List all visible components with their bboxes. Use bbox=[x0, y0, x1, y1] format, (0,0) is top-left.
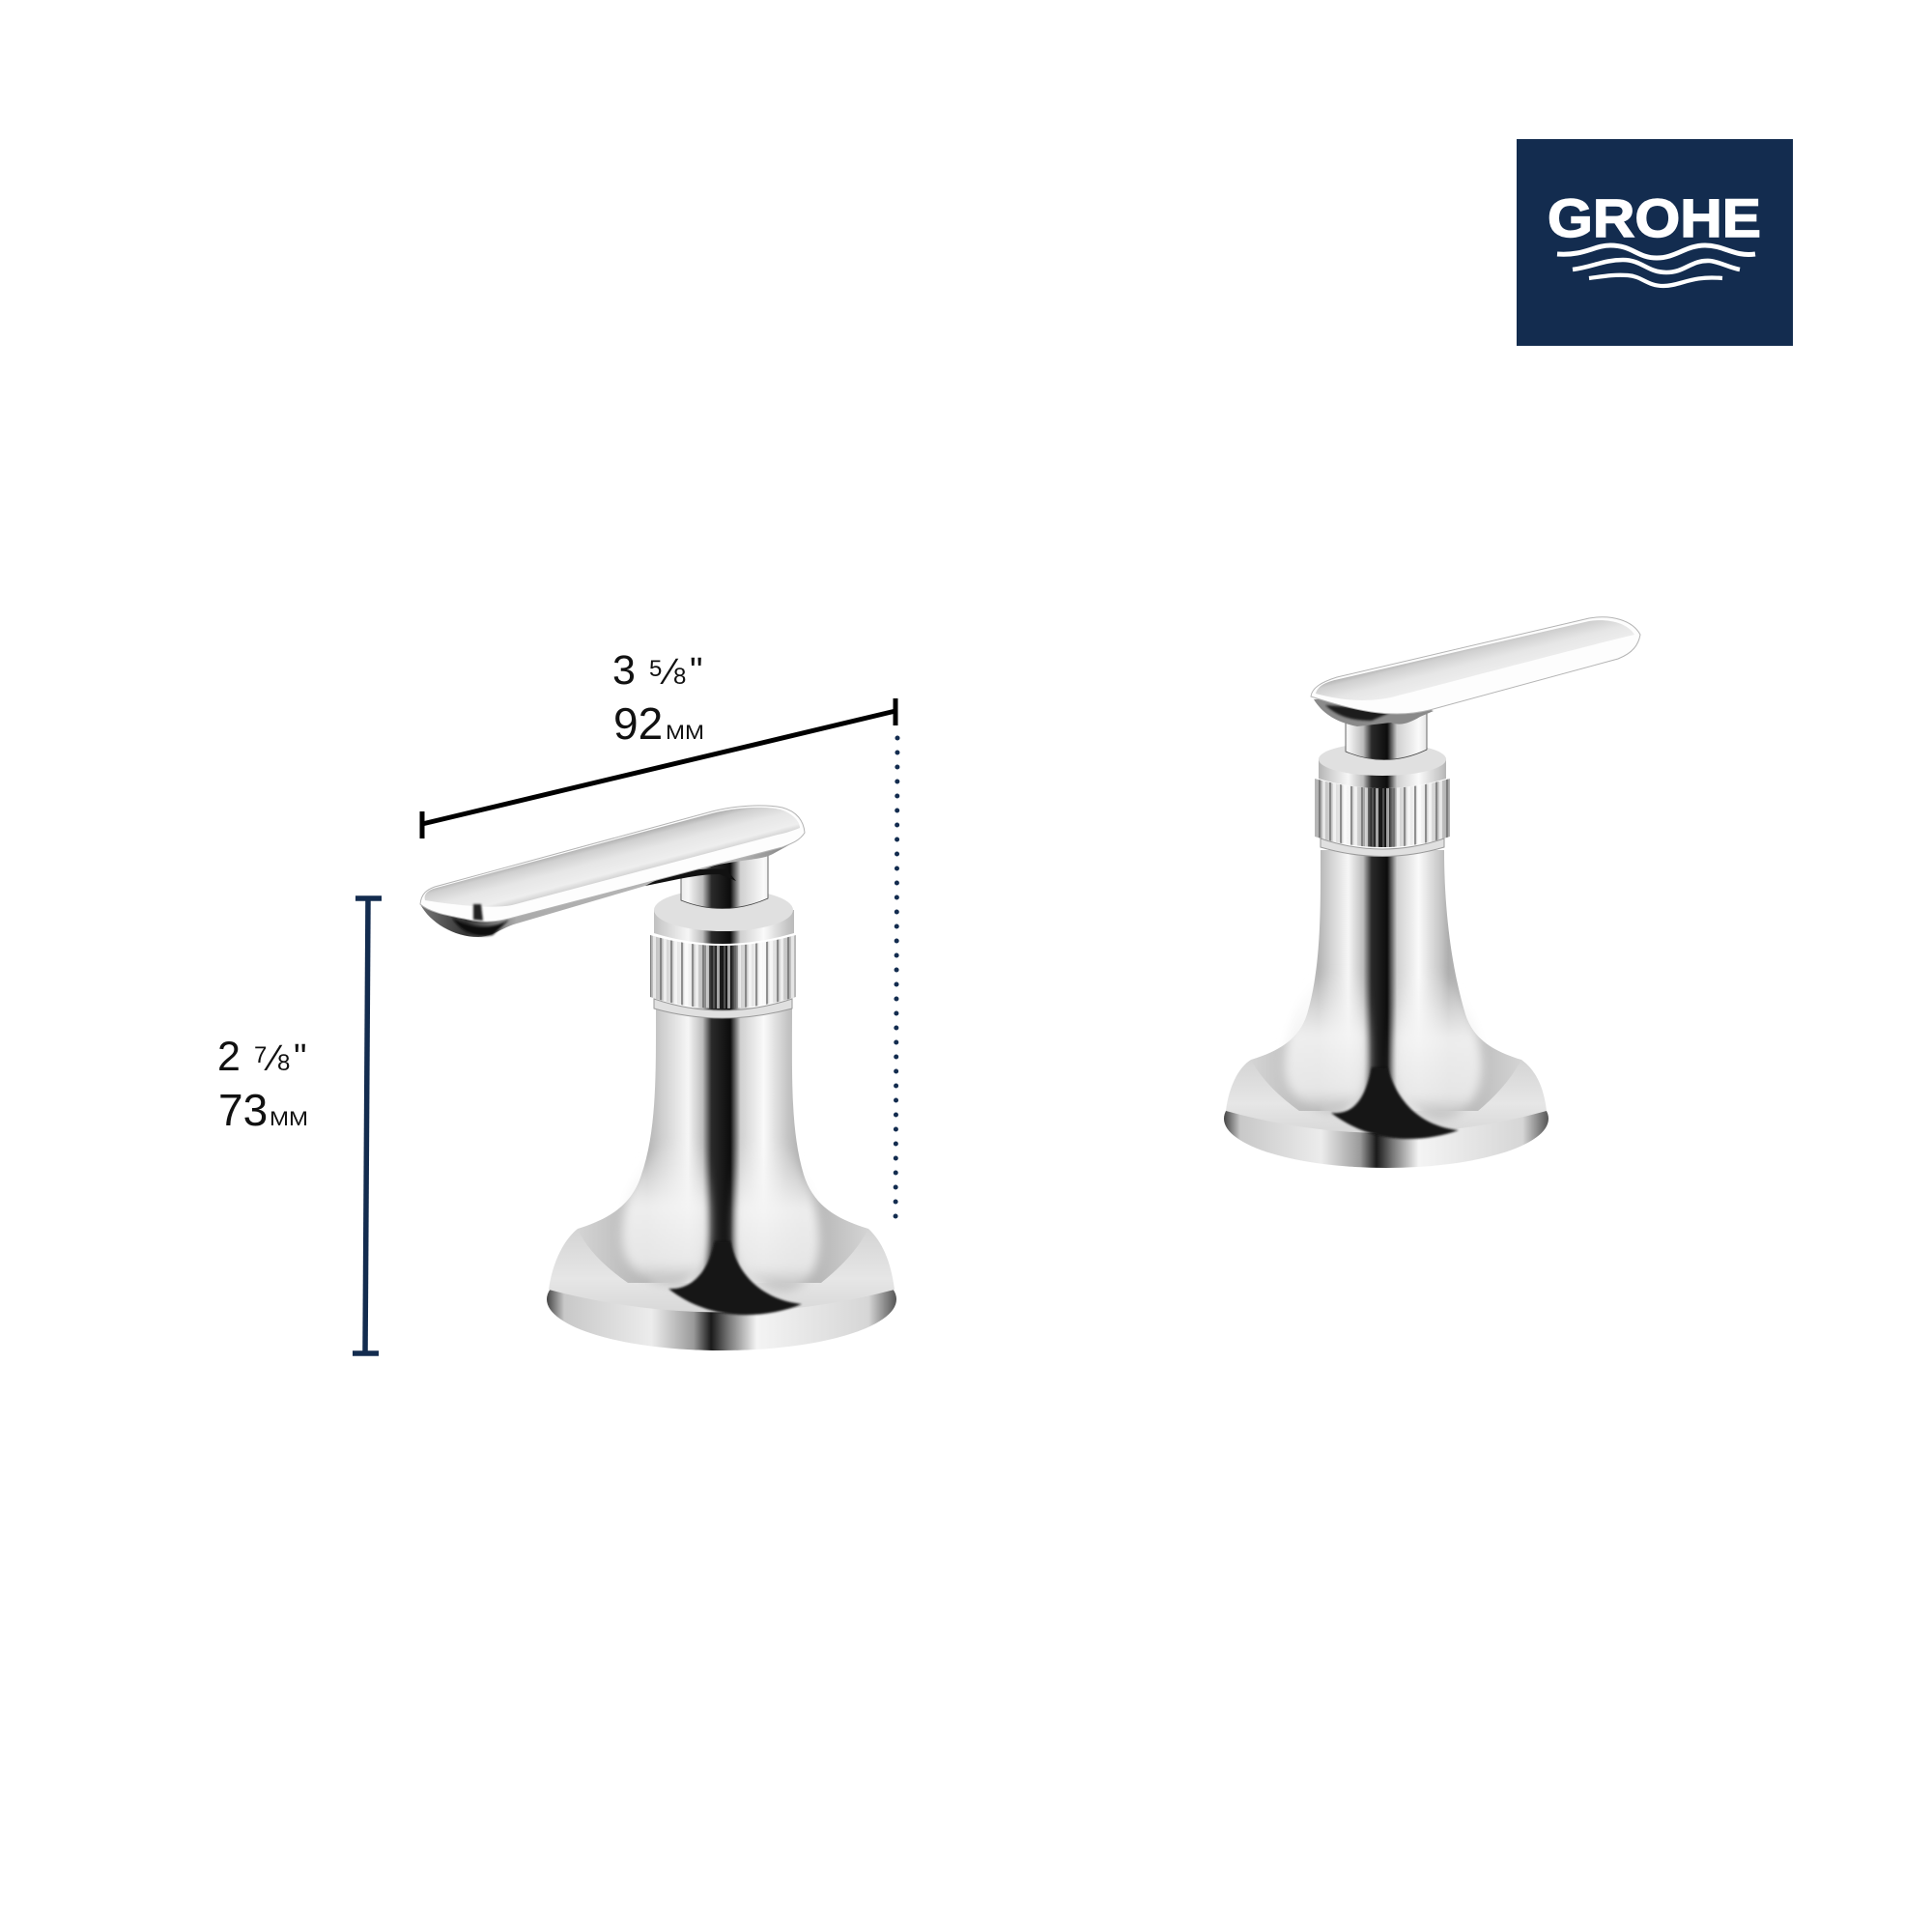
right faucet: body bbox=[1251, 850, 1521, 1139]
right faucet: stem bbox=[1346, 705, 1427, 760]
dimension: height label bbox=[217, 1034, 308, 1135]
logo: GROHE bbox=[1517, 139, 1793, 346]
dimension: height label: ⁄ bbox=[264, 1038, 283, 1079]
left faucet: cap bbox=[654, 889, 794, 944]
dimension: height label: 8 bbox=[277, 1050, 290, 1076]
left faucet: base bbox=[547, 1229, 896, 1350]
left faucet: stem bbox=[681, 855, 768, 909]
dimension: height label: 73 bbox=[218, 1085, 268, 1135]
right faucet: base bbox=[1224, 1060, 1548, 1168]
right faucet: cap bbox=[1319, 743, 1446, 788]
dimension: width label: " bbox=[690, 651, 703, 692]
right faucet handle bbox=[1224, 617, 1640, 1168]
dimension: height label: 2 bbox=[217, 1034, 241, 1080]
dimension: width label bbox=[612, 647, 704, 749]
logo: GROHE: GROHE bbox=[1548, 187, 1761, 248]
dimension: width label: MM bbox=[666, 722, 704, 744]
left faucet handle bbox=[420, 806, 896, 1350]
dimension: dotted guide bbox=[895, 738, 897, 1230]
right faucet: lever bbox=[1311, 617, 1640, 726]
dimension: width label: 92 bbox=[613, 698, 663, 749]
dimension: width label: ⁄ bbox=[660, 652, 679, 693]
dimension: width line bbox=[422, 698, 895, 838]
right faucet: knurled collar bbox=[1315, 779, 1450, 856]
dimension: width label: 3 bbox=[612, 647, 636, 694]
dimension: height label: 7 bbox=[254, 1042, 267, 1068]
left faucet: lever bbox=[420, 806, 805, 937]
dimension: width label: 8 bbox=[673, 664, 686, 690]
dimension: width label: 5 bbox=[649, 656, 662, 682]
left faucet: body bbox=[578, 1008, 868, 1315]
dimension: height label: " bbox=[294, 1037, 307, 1078]
dimension: height label: MM bbox=[270, 1108, 308, 1130]
left faucet: knurled collar bbox=[650, 935, 796, 1018]
dimension: height line bbox=[353, 898, 382, 1353]
